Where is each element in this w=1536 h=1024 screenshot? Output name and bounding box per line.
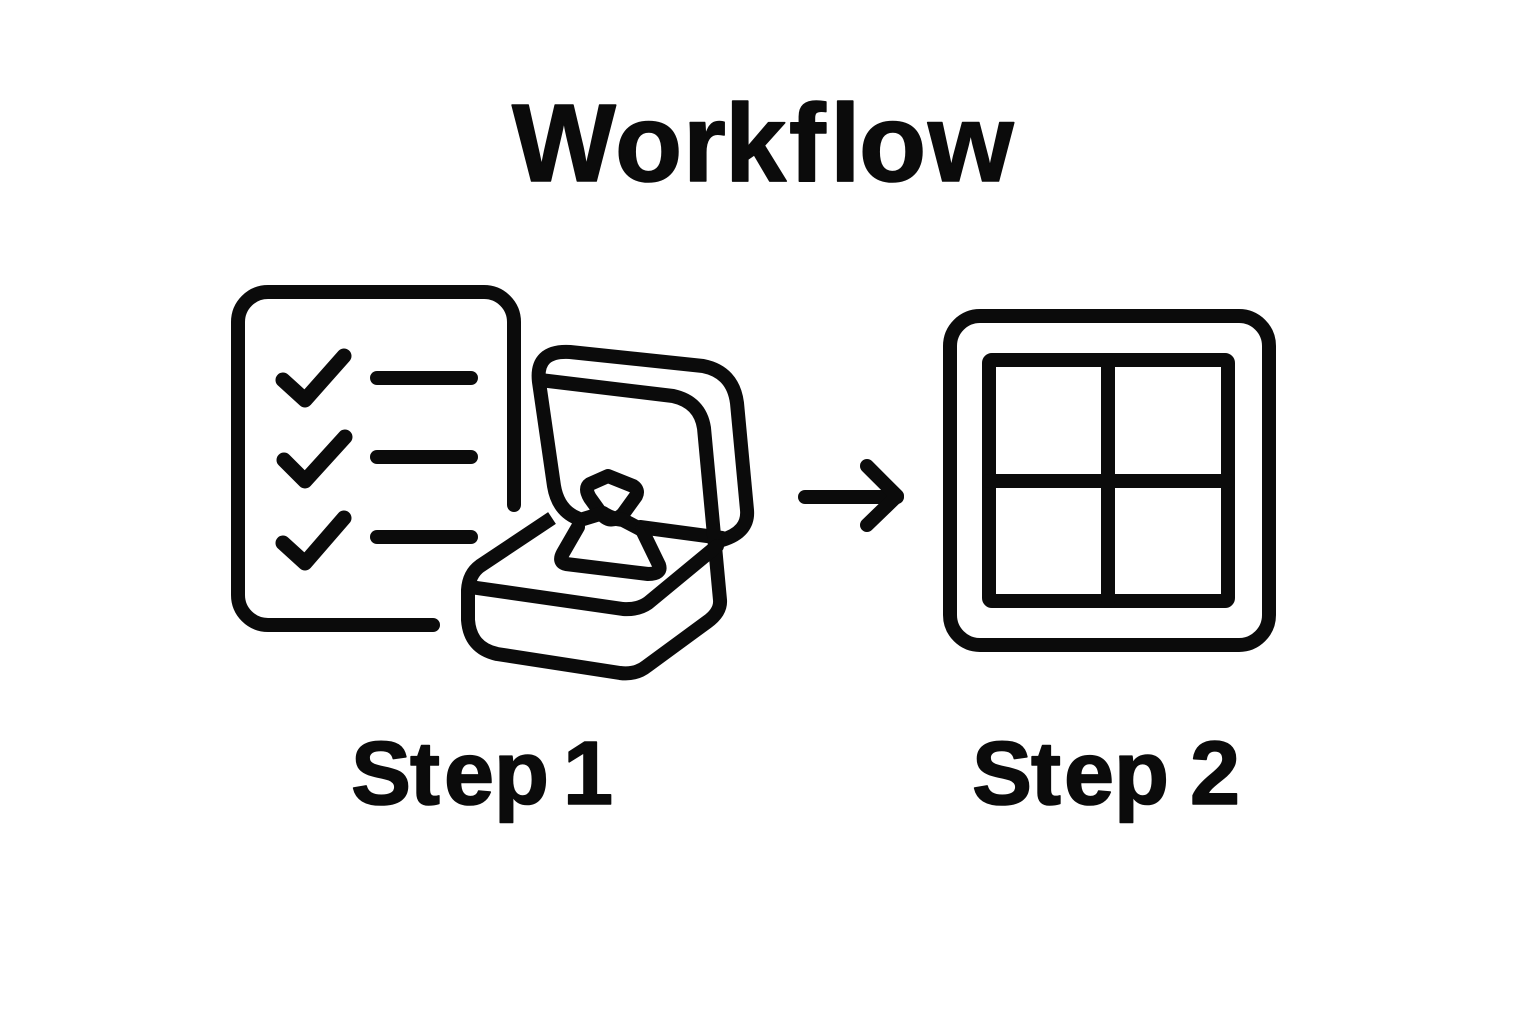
- label: step 2: Step 2: [0, 724, 1240, 824]
- icon: grid window: [950, 316, 1269, 645]
- title: Workflow: [512, 82, 1014, 205]
- icon: checklist document: [238, 292, 514, 625]
- label: step 1: Step 1: [0, 724, 613, 824]
- icon: ring box: [468, 352, 747, 673]
- arrow: [805, 466, 897, 525]
